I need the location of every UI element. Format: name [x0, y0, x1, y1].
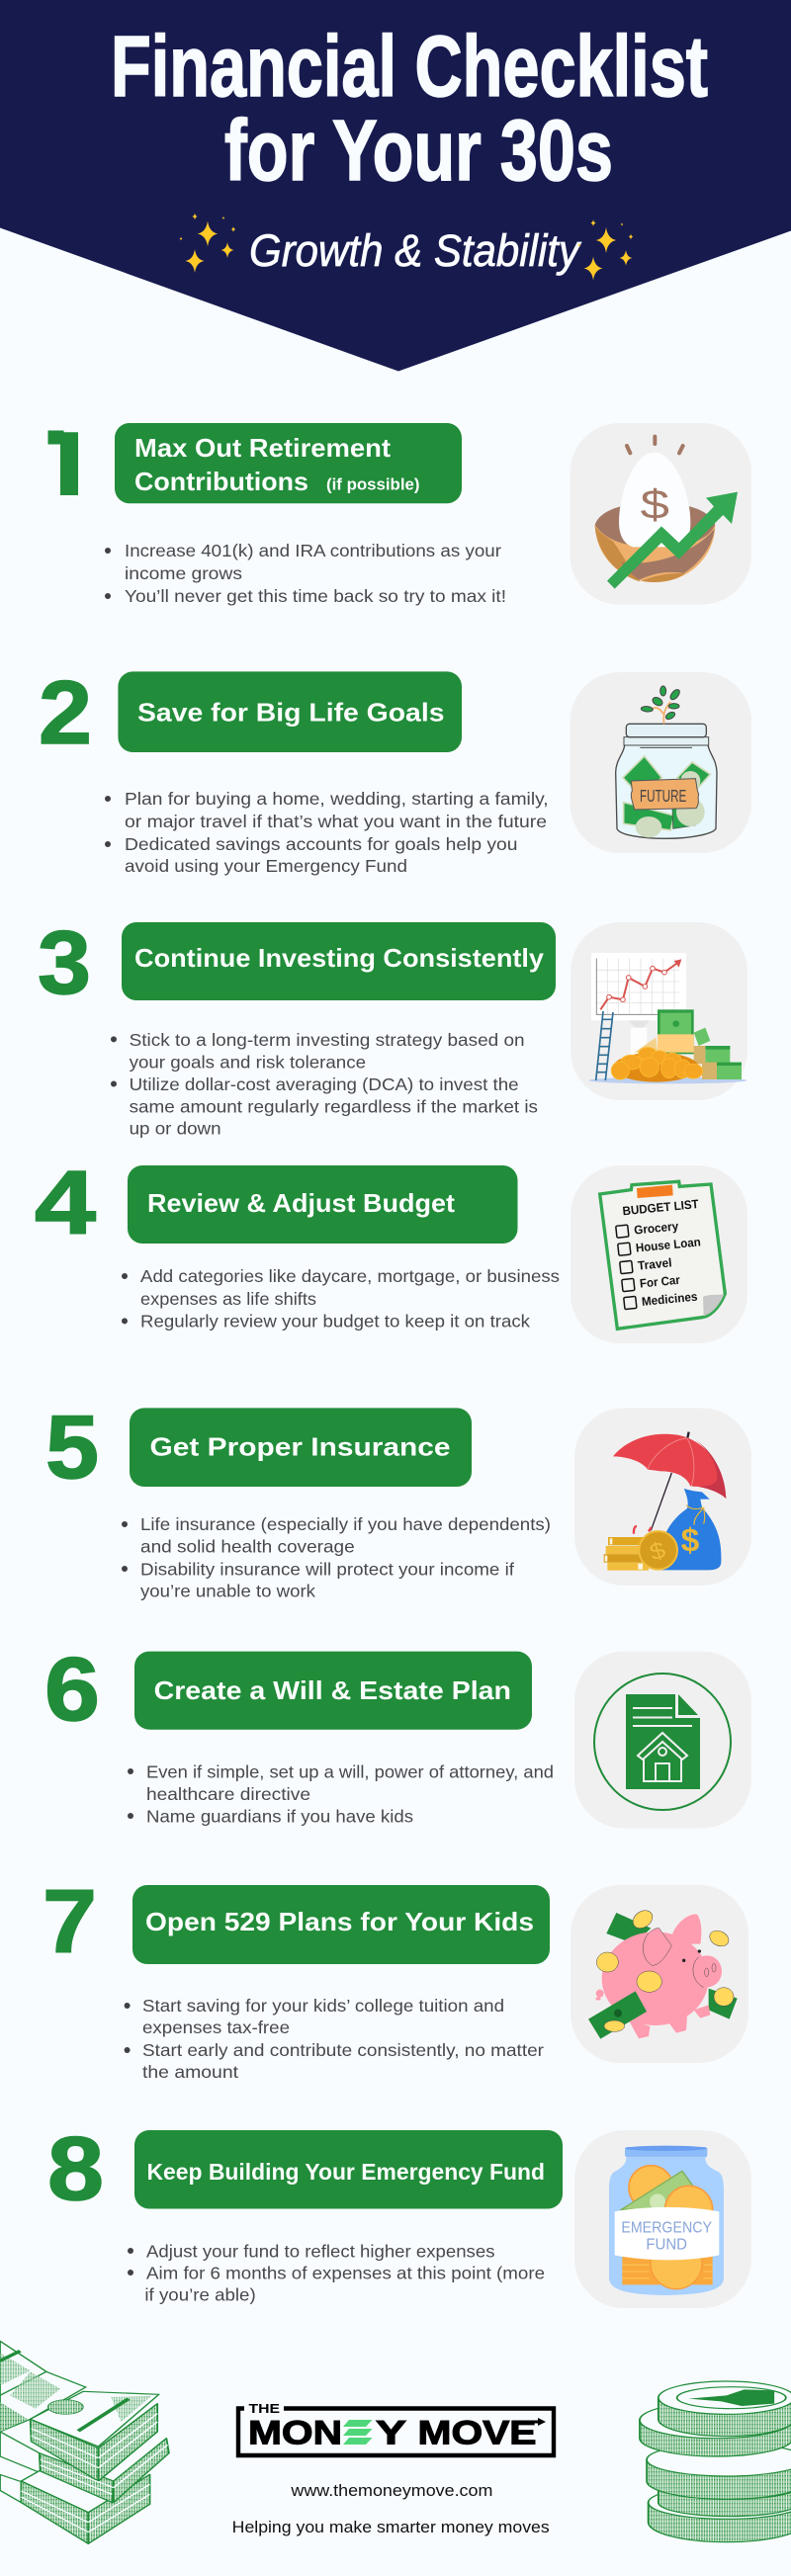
bullet list 5: Life insurance (especially if you have dependents) — [140, 1514, 551, 1534]
heading pill 2: Save for Big Life Goals — [137, 697, 445, 727]
icon card: piggy bank — [571, 1885, 748, 2063]
icon card: umbrella over money bag: $ — [647, 1536, 668, 1566]
bullet list 3: Utilize dollar-cost averaging (DCA) to invest the — [130, 1074, 519, 1094]
bullet list 4: Regularly review your budget to keep it on track — [140, 1312, 530, 1331]
bullet list 7: expenses tax-free — [142, 2018, 290, 2037]
bullet list 2: or major travel if that’s what you want in the future — [125, 812, 547, 831]
bullet list 8: Aim for 6 months of expenses at this point (more — [146, 2264, 545, 2283]
heading pill 5: Get Proper Insurance — [150, 1431, 451, 1461]
bullet list 2: Dedicated savings accounts for goals help you — [125, 834, 518, 854]
icon card: nest egg with arrow: $ — [641, 480, 669, 527]
heading pill 6 — [134, 1652, 532, 1730]
heading pill 7: Open 529 Plans for Your Kids — [145, 1907, 534, 1936]
bullet list 1 — [105, 541, 506, 606]
icon card: future jar — [570, 672, 751, 853]
title: for Your 30s — [224, 103, 613, 199]
icon card: future jar: FUTURE — [640, 786, 686, 806]
logo: The Money Move — [238, 2401, 554, 2455]
illustration: money stacks — [0, 2341, 169, 2543]
bullet list 4 — [122, 1266, 560, 1331]
number 2: 2 — [39, 663, 92, 763]
icon card: budget list — [571, 1165, 747, 1343]
bullet list 2: Plan for buying a home, wedding, starting a family, — [125, 789, 549, 809]
icon: sparkles right — [577, 219, 633, 281]
header banner — [0, 0, 791, 372]
panel: step 7 — [43, 1872, 748, 2082]
panel: step 1 — [33, 415, 751, 606]
number 5: 5 — [45, 1398, 99, 1498]
bullet list 3 — [111, 1030, 538, 1138]
panel: step 8 — [47, 2119, 751, 2308]
bullet list 7 — [125, 1996, 544, 2082]
icon card: budget list: Grocery — [634, 1219, 679, 1238]
heading pill 3 — [122, 922, 556, 1000]
number 4: 4 — [35, 1154, 96, 1253]
title — [111, 19, 708, 199]
icon card: budget list: Travel — [637, 1255, 672, 1273]
bullet list 3: Stick to a long-term investing strategy based on — [130, 1030, 525, 1050]
bullet list 6: Even if simple, set up a will, power of attorney, and — [146, 1761, 554, 1781]
website url: www.themoneymove.com — [290, 2481, 492, 2500]
icon card: umbrella over money bag — [574, 1408, 751, 1586]
tagline: Helping you make smarter money moves — [232, 2518, 550, 2536]
bullet list 8: if you’re able) — [144, 2284, 256, 2304]
illustration: coin stack — [640, 2381, 791, 2542]
bullet list 7: Start early and contribute consistently, no matter — [142, 2040, 544, 2060]
subtitle: Growth & Stability — [249, 225, 581, 276]
bullet list 3: your goals and risk tolerance — [130, 1052, 366, 1072]
number 7: 7 — [43, 1872, 97, 1972]
bullet list 7: Start saving for your kids’ college tuition and — [142, 1996, 504, 2016]
panel: step 3 — [38, 913, 747, 1138]
bullet list 2 — [105, 789, 549, 876]
heading pill 6: Create a Will & Estate Plan — [154, 1675, 511, 1705]
icon card: chart and money pile — [571, 922, 747, 1100]
icon card: emergency fund jar: EMERGENCY — [621, 2220, 712, 2237]
bullet list 6 — [128, 1761, 554, 1827]
bullet list 5: you’re unable to work — [140, 1582, 315, 1601]
heading pill 1: Max Out Retirement — [134, 433, 391, 463]
heading pill 3: Continue Investing Consistently — [134, 943, 545, 973]
logo: The Money Move: MOVE — [417, 2415, 536, 2452]
number 6: 6 — [44, 1640, 100, 1740]
bullet list 6: Name guardians if you have kids — [146, 1807, 413, 1827]
logo: The Money Move: Y — [376, 2415, 406, 2452]
bullet list 1: Increase 401(k) and IRA contributions as your — [125, 541, 501, 560]
icon: sparkles left — [179, 214, 235, 273]
number 1 — [47, 431, 78, 495]
panel: step 5 — [45, 1398, 751, 1601]
icon card: emergency fund jar: FUND — [646, 2236, 687, 2253]
heading pill 4: Review & Adjust Budget — [147, 1188, 455, 1218]
icon card: budget list: For Car — [639, 1273, 681, 1291]
heading pill 8: Keep Building Your Emergency Fund — [146, 2159, 545, 2185]
bullet list 6: healthcare directive — [146, 1784, 310, 1804]
panel: step 6 — [44, 1640, 751, 1829]
heading pill 7 — [132, 1885, 550, 1964]
heading pill 4 — [128, 1165, 518, 1244]
icon card: budget list: Medicines — [641, 1290, 698, 1309]
bullet list 3: same amount regularly regardless if the market is — [130, 1097, 538, 1117]
bullet list 3: up or down — [130, 1118, 221, 1138]
bullet list 4: Add categories like daycare, mortgage, or business — [140, 1266, 560, 1286]
number 3: 3 — [38, 913, 91, 1013]
bullet list 5: and solid health coverage — [140, 1536, 355, 1556]
heading pill 1: (if possible) — [326, 474, 419, 493]
heading pill 1 — [115, 423, 462, 503]
logo: The Money Move: MON — [248, 2415, 342, 2452]
bullet list 1: You’ll never get this time back so try to max it! — [125, 586, 506, 606]
icon card: estate document — [574, 1652, 751, 1829]
icon card: budget list: House Loan — [635, 1235, 701, 1255]
icon card: emergency fund jar — [574, 2130, 751, 2308]
icon card: budget list: BUDGET LIST — [622, 1197, 700, 1218]
bullet list 5: Disability insurance will protect your income if — [140, 1560, 514, 1580]
number 1: 1 — [33, 415, 102, 515]
bullet list 4: expenses as life shifts — [140, 1289, 316, 1309]
heading pill 5 — [130, 1408, 472, 1487]
bullet list 8 — [128, 2242, 545, 2304]
panel: step 4 — [35, 1154, 747, 1343]
logo: The Money Move: THE — [249, 2401, 280, 2416]
heading pill 1: Contributions — [134, 467, 308, 496]
bullet list 5 — [122, 1514, 551, 1601]
bullet list 8: Adjust your fund to reflect higher expenses — [146, 2242, 495, 2262]
icon card: nest egg with arrow — [570, 423, 751, 605]
bullet list 7: the amount — [142, 2062, 238, 2082]
bullet list 2: avoid using your Emergency Fund — [125, 856, 407, 876]
bullet list 1: income grows — [125, 563, 242, 583]
panel: step 2 — [39, 663, 751, 876]
icon card: umbrella over money bag: $ — [681, 1522, 700, 1559]
heading pill 2 — [118, 671, 462, 752]
heading pill 8 — [134, 2130, 563, 2208]
number 8: 8 — [47, 2119, 104, 2219]
